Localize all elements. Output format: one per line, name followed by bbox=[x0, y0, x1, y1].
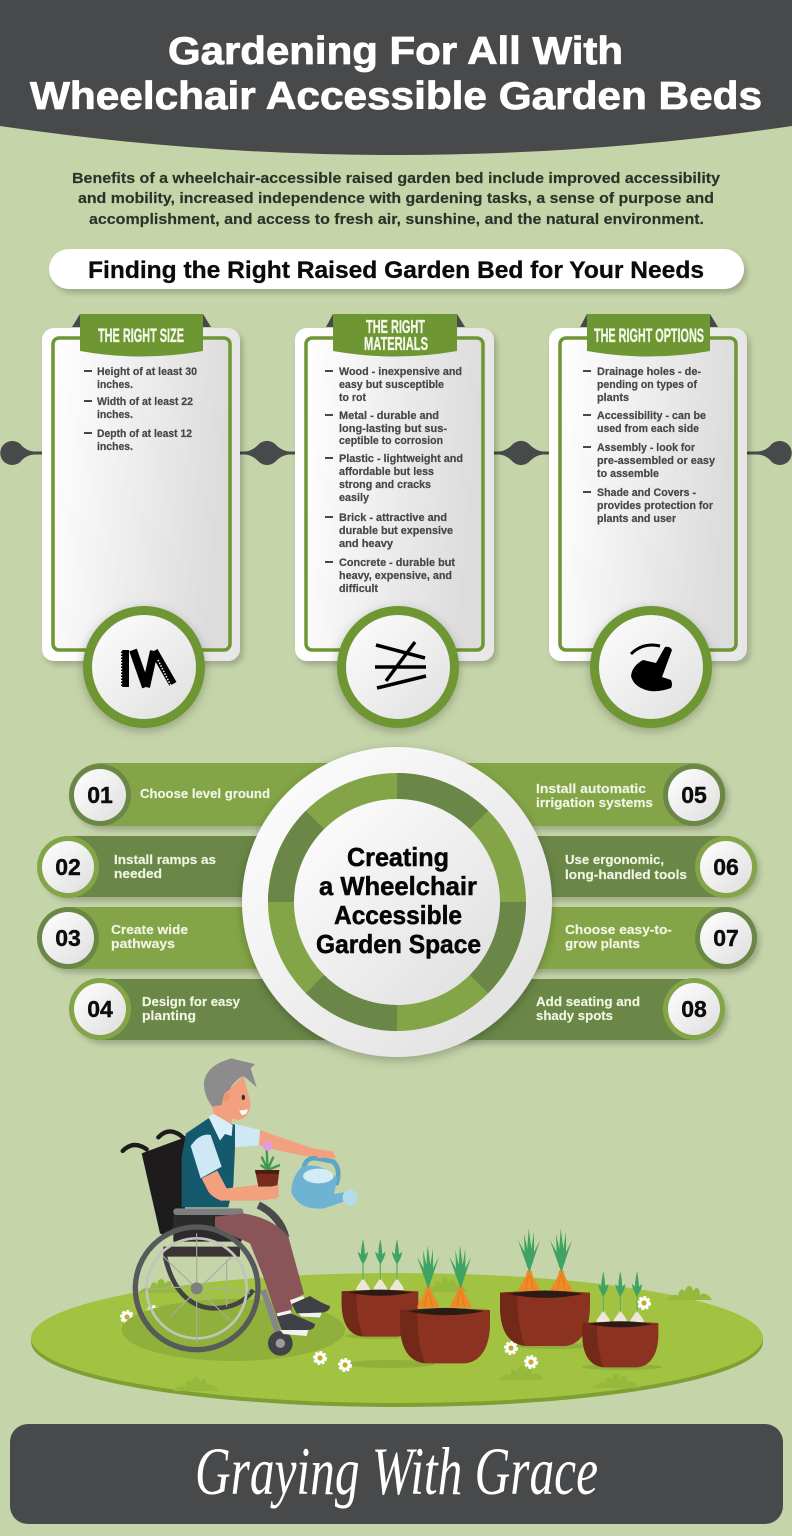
list: materials: Metal - durable and bbox=[339, 410, 439, 422]
pot with onions, back right bbox=[500, 1229, 590, 1346]
step 07: grow plants bbox=[565, 937, 640, 951]
step 08: 08 bbox=[681, 996, 707, 1022]
head bbox=[204, 1058, 257, 1130]
torso bbox=[182, 1114, 260, 1207]
list: size requirements: Depth of at least 12 bbox=[97, 428, 192, 440]
step 04: planting bbox=[142, 1009, 196, 1023]
step 03: pathways bbox=[111, 937, 175, 951]
list: size requirements: Width of at least 22 bbox=[97, 396, 193, 408]
step 04: 04 bbox=[87, 996, 113, 1022]
list: materials: long-lasting but sus- bbox=[339, 423, 447, 435]
intro text: and mobility, increased independence with gardening tasks, a sense of purpose and bbox=[78, 191, 714, 207]
hub title bbox=[316, 842, 481, 959]
section heading pill: Finding the Right Raised Garden Bed for Your Needs bbox=[88, 257, 704, 284]
step 05: irrigation systems bbox=[536, 796, 653, 810]
ribbon: the right materials bbox=[326, 314, 465, 356]
step 04 bbox=[69, 978, 240, 1040]
list: materials: affordable but less bbox=[339, 466, 434, 478]
intro text bbox=[72, 171, 720, 228]
small potted flower bbox=[255, 1141, 280, 1200]
connector line bbox=[0, 441, 792, 465]
hub title: Garden Space bbox=[316, 929, 481, 959]
central hub bbox=[242, 747, 552, 1057]
list: materials: Plastic - lightweight and bbox=[339, 453, 463, 465]
list: options: to assemble bbox=[597, 468, 659, 480]
list: size requirements bbox=[84, 366, 197, 453]
list: size requirements: inches. bbox=[97, 409, 133, 421]
panel: the right size bbox=[42, 314, 240, 724]
hub title: Creating bbox=[347, 842, 449, 872]
wheelchair bbox=[123, 1131, 293, 1356]
step 02: 02 bbox=[55, 854, 81, 880]
list: options: Shade and Covers - bbox=[597, 487, 696, 499]
step bars bbox=[38, 763, 757, 1040]
panel: the right options bbox=[549, 314, 747, 724]
ribbon: the right options bbox=[580, 314, 718, 356]
list: materials: easy but susceptible bbox=[339, 379, 444, 391]
step 01: Choose level ground bbox=[140, 787, 270, 801]
step 07 bbox=[565, 907, 757, 969]
step 06: 06 bbox=[713, 854, 739, 880]
illustration: garden ground bbox=[31, 1273, 763, 1407]
list: materials: heavy, expensive, and bbox=[339, 570, 452, 582]
list: materials bbox=[325, 366, 463, 595]
arms bbox=[202, 1130, 336, 1201]
step 01: 01 bbox=[87, 782, 113, 808]
list: options: pre-assembled or easy bbox=[597, 455, 715, 467]
list: options: provides protection for bbox=[597, 500, 714, 512]
icon: folding ruler bbox=[88, 610, 200, 724]
list: materials: Concrete - durable but bbox=[339, 557, 455, 569]
intro text: Benefits of a wheelchair-accessible raised garden bed include improved accessibility bbox=[72, 171, 720, 187]
title bbox=[30, 30, 762, 118]
list: options: Assembly - look for bbox=[597, 442, 696, 454]
step 07: Choose easy-to- bbox=[565, 923, 672, 937]
ribbon: the right materials: MATERIALS bbox=[364, 334, 428, 354]
footer banner: Graying With Grace bbox=[195, 1433, 598, 1509]
list: size requirements: inches. bbox=[97, 441, 133, 453]
hub title: a Wheelchair bbox=[319, 871, 477, 901]
step 02: needed bbox=[114, 867, 162, 881]
list: materials: and heavy bbox=[339, 538, 393, 550]
watering can bbox=[291, 1150, 357, 1209]
title: Wheelchair Accessible Garden Beds bbox=[30, 75, 762, 118]
list: options: pending on types of bbox=[597, 379, 697, 391]
list: size requirements: Height of at least 30 bbox=[97, 366, 197, 378]
step 07: 07 bbox=[713, 925, 739, 951]
list: materials: to rot bbox=[339, 392, 366, 404]
header banner bbox=[0, 0, 792, 155]
list: options: plants and user bbox=[597, 513, 677, 525]
list: materials: durable but expensive bbox=[339, 525, 453, 537]
list: options: plants bbox=[597, 392, 629, 404]
list: options bbox=[583, 366, 715, 525]
intro text: accomplishment, and access to fresh air, sunshine, and the natural environment. bbox=[89, 212, 704, 228]
ribbon: the right materials: THE RIGHT bbox=[366, 317, 425, 337]
hub title: Accessible bbox=[334, 900, 462, 930]
step 08: Add seating and bbox=[536, 995, 640, 1009]
step 03: 03 bbox=[55, 925, 81, 951]
list: materials: strong and cracks bbox=[339, 479, 431, 491]
panel: the right materials bbox=[295, 314, 494, 724]
list: options: used from each side bbox=[597, 423, 699, 435]
list: materials: easily bbox=[339, 492, 369, 504]
step 03 bbox=[37, 907, 188, 969]
step 01 bbox=[69, 764, 270, 826]
pot with garlic, back left bbox=[342, 1239, 418, 1337]
step 05: Install automatic bbox=[536, 782, 646, 796]
title: Gardening For All With bbox=[168, 30, 623, 73]
step 06: Use ergonomic, bbox=[565, 853, 664, 867]
steps diagram bbox=[37, 747, 757, 1057]
pot with onions, front left bbox=[400, 1245, 490, 1363]
list: materials: Wood - inexpensive and bbox=[339, 366, 462, 378]
step 06 bbox=[565, 836, 757, 898]
list: materials: difficult bbox=[339, 583, 378, 595]
list: size requirements: inches. bbox=[97, 379, 133, 391]
step 02: Install ramps as bbox=[114, 853, 216, 867]
list: options: Drainage holes - de- bbox=[597, 366, 701, 378]
step 05 bbox=[536, 764, 725, 826]
illustration: person in wheelchair bbox=[122, 1058, 357, 1361]
step 04: Design for easy bbox=[142, 995, 240, 1009]
icon: material planks bbox=[342, 610, 454, 724]
icon: hand pointing bbox=[594, 610, 708, 724]
section heading pill bbox=[49, 249, 744, 289]
list: materials: Brick - attractive and bbox=[339, 512, 447, 524]
step 03: Create wide bbox=[111, 923, 188, 937]
list: materials: ceptible to corrosion bbox=[339, 435, 443, 447]
step 06: long-handled tools bbox=[565, 868, 687, 882]
footer banner bbox=[10, 1424, 783, 1524]
illustration: plant pots bbox=[342, 1229, 658, 1367]
pot with garlic, front right bbox=[582, 1271, 658, 1367]
ribbon: the right size bbox=[72, 314, 211, 356]
list: options: Accessibility - can be bbox=[597, 410, 706, 422]
ribbon: the right size: THE RIGHT SIZE bbox=[98, 326, 184, 347]
pants and shoes bbox=[215, 1213, 330, 1336]
step 08 bbox=[536, 978, 725, 1040]
step 05: 05 bbox=[681, 782, 707, 808]
step 08: shady spots bbox=[536, 1009, 613, 1023]
step 02 bbox=[37, 836, 216, 898]
ribbon: the right options: THE RIGHT OPTIONS bbox=[594, 326, 704, 347]
